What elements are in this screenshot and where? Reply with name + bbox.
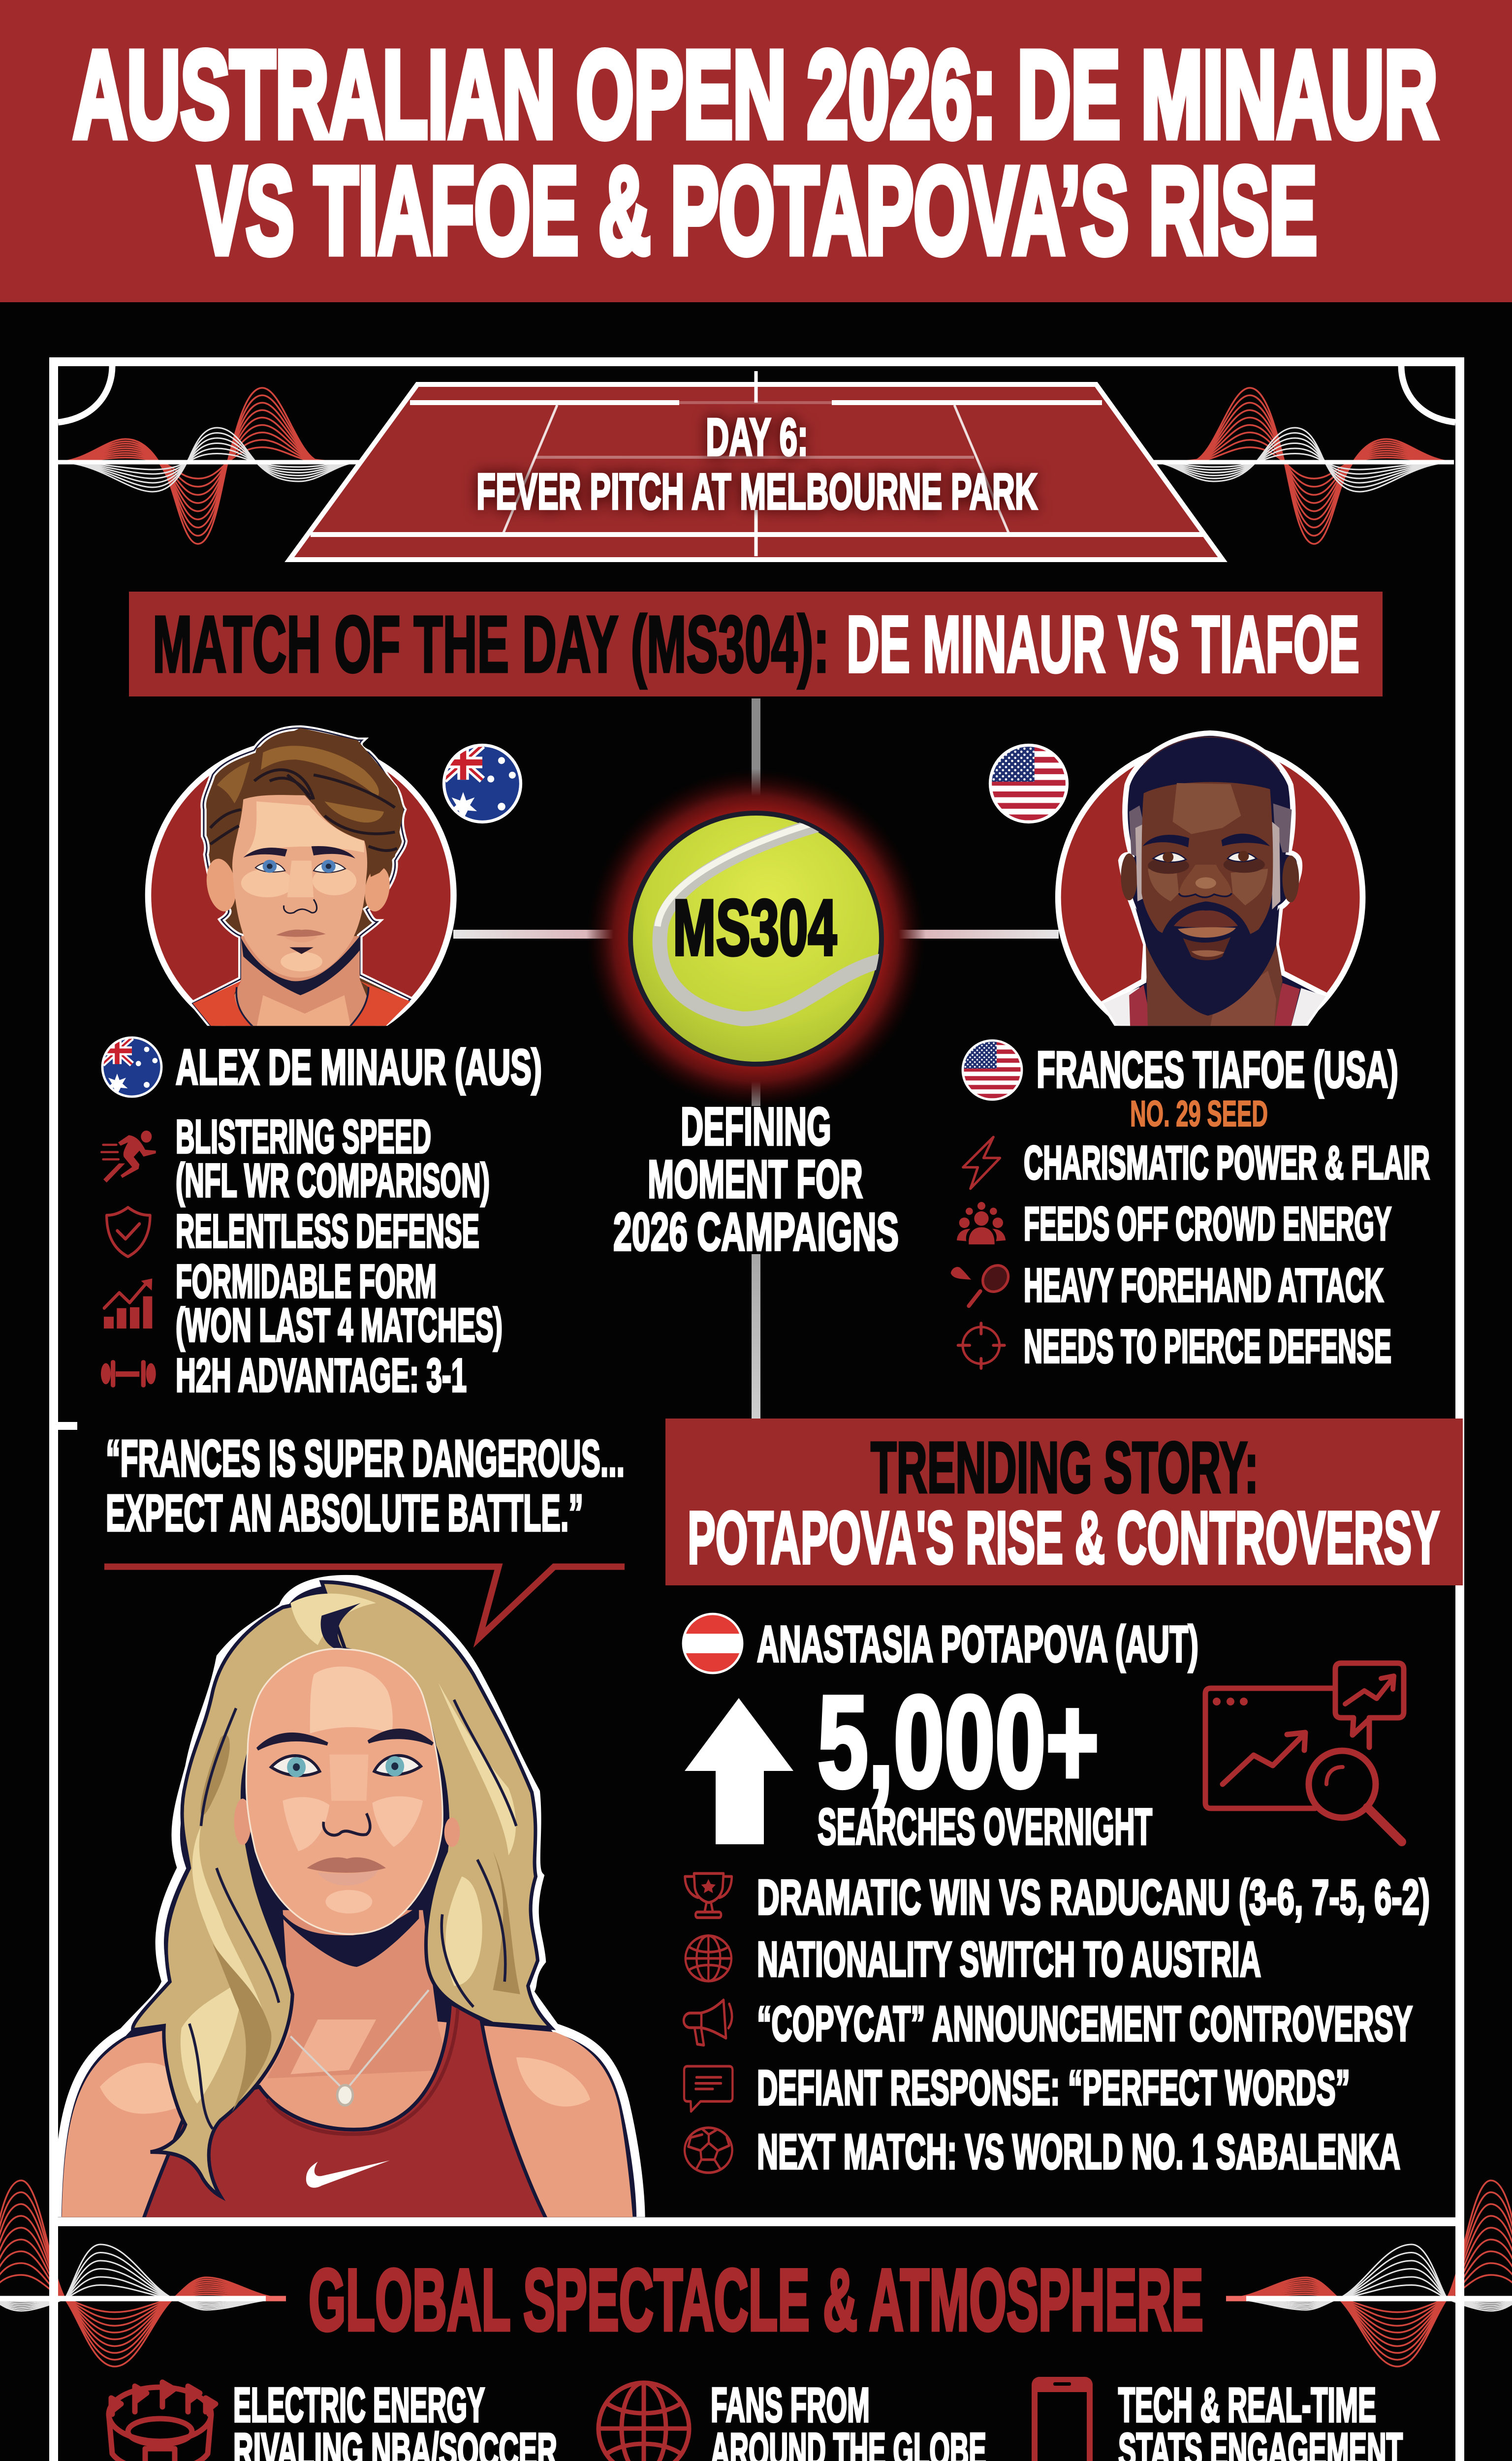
- text: tech: [1118, 2378, 1403, 2461]
- text: fans: FANS FROM: [711, 2378, 870, 2432]
- decorative wave left bottom: [0, 2180, 286, 2366]
- panel: Tiafoe attributes: [1024, 1136, 1430, 1373]
- flag and name: Potapova: [683, 1614, 1198, 1673]
- panel: de Minaur attributes: FORMIDABLE FORM: [176, 1255, 437, 1308]
- icon: trophy: [685, 1873, 732, 1918]
- icon: smartphone: [1032, 2377, 1093, 2461]
- icons: Potapova story: [684, 1873, 732, 2173]
- decorative wave right top: [1131, 388, 1454, 544]
- portrait: Anastasia Potapova: [57, 1579, 641, 2221]
- match of the day banner: MATCH OF THE DAY (MS304):: [153, 599, 829, 689]
- tennis court header: [289, 371, 1223, 560]
- speech bubble line: [104, 1567, 625, 1638]
- icon: target: [958, 1323, 1005, 1368]
- icon: soccer ball: [685, 2128, 732, 2173]
- panel: de Minaur attributes: RELENTLESS DEFENSE: [176, 1205, 479, 1258]
- icon: analytics window: [1205, 1663, 1404, 1842]
- title banner: [0, 0, 1512, 302]
- court heading: DAY 6:: [706, 407, 808, 467]
- icon: global network: [598, 2383, 689, 2461]
- panel: de Minaur attributes: H2H ADVANTAGE: 3-1: [176, 1349, 467, 1402]
- text: electric energy: [233, 2378, 557, 2461]
- panel: de Minaur name: ALEX DE MINAUR (AUS): [176, 1040, 542, 1095]
- flag and name: Potapova: ANASTASIA POTAPOVA (AUT): [757, 1616, 1198, 1673]
- stat: 5,000+ searches: 5,000+: [818, 1669, 1099, 1815]
- icons: de Minaur attributes: [101, 1131, 156, 1388]
- portrait: Frances Tiafoe: [1058, 733, 1363, 1052]
- center vertical line: [752, 698, 760, 1422]
- stat: 5,000+ searches: SEARCHES OVERNIGHT: [818, 1798, 1152, 1856]
- text: fans: [711, 2378, 986, 2461]
- panel: Tiafoe name and seed: NO. 29 SEED: [1130, 1093, 1268, 1134]
- icon: globe: [686, 1936, 731, 1981]
- panel: de Minaur attributes: [176, 1110, 503, 1402]
- decorative wave right bottom: [1226, 2180, 1512, 2366]
- icons: Tiafoe attributes: [951, 1137, 1013, 1368]
- icon: racket: [951, 1261, 1013, 1306]
- text: defining moment: DEFINING: [681, 1097, 831, 1157]
- arrow up: [685, 1698, 793, 1844]
- tennis ball MS304: MS304: [673, 883, 837, 972]
- court heading: [476, 407, 1038, 520]
- text: defining moment: MOMENT FOR: [648, 1149, 863, 1209]
- text: defining moment: [613, 1097, 899, 1262]
- flag: USA large: [990, 745, 1067, 822]
- icon: rising chart: [104, 1278, 152, 1328]
- panel: de Minaur attributes: BLISTERING SPEED: [176, 1110, 431, 1163]
- connector lines: [453, 930, 1059, 939]
- icon: megaphone: [684, 2000, 732, 2045]
- icon: shield: [107, 1207, 150, 1257]
- icon: chat bubble: [684, 2066, 732, 2112]
- panel: de Minaur attributes: (WON LAST 4 MATCHES): [176, 1299, 503, 1352]
- icon: crowd: [957, 1202, 1006, 1244]
- panel: de Minaur attributes: (NFL WR COMPARISON): [176, 1154, 490, 1207]
- icon: runner: [101, 1131, 156, 1182]
- icon: lightning bolt: [963, 1137, 1000, 1189]
- panel: de Minaur name: [102, 1038, 542, 1097]
- panel: Potapova story list: [757, 1870, 1430, 2179]
- flag: Australia large: [444, 745, 521, 822]
- quote: [106, 1430, 625, 1542]
- text: electric energy: ELECTRIC ENERGY: [233, 2378, 485, 2432]
- tennis ball MS304: [586, 769, 926, 1108]
- text: defining moment: 2026 CAMPAIGNS: [613, 1202, 899, 1262]
- decorative wave left top: [58, 388, 381, 544]
- panel: Tiafoe name and seed: [963, 1041, 1398, 1134]
- panel: trending story heading: [665, 1419, 1463, 1585]
- stat: 5,000+ searches: [818, 1669, 1152, 1856]
- icon: stadium: [109, 2382, 216, 2461]
- icon: dumbbell: [101, 1360, 156, 1388]
- portrait: Alex de Minaur: [148, 728, 453, 1049]
- court-style frame: [49, 362, 1464, 2461]
- quote: “FRANCES IS SUPER DANGEROUS...: [106, 1430, 625, 1487]
- court heading: FEVER PITCH AT MELBOURNE PARK: [476, 463, 1038, 520]
- quote: EXPECT AN ABSOLUTE BATTLE.”: [106, 1484, 583, 1542]
